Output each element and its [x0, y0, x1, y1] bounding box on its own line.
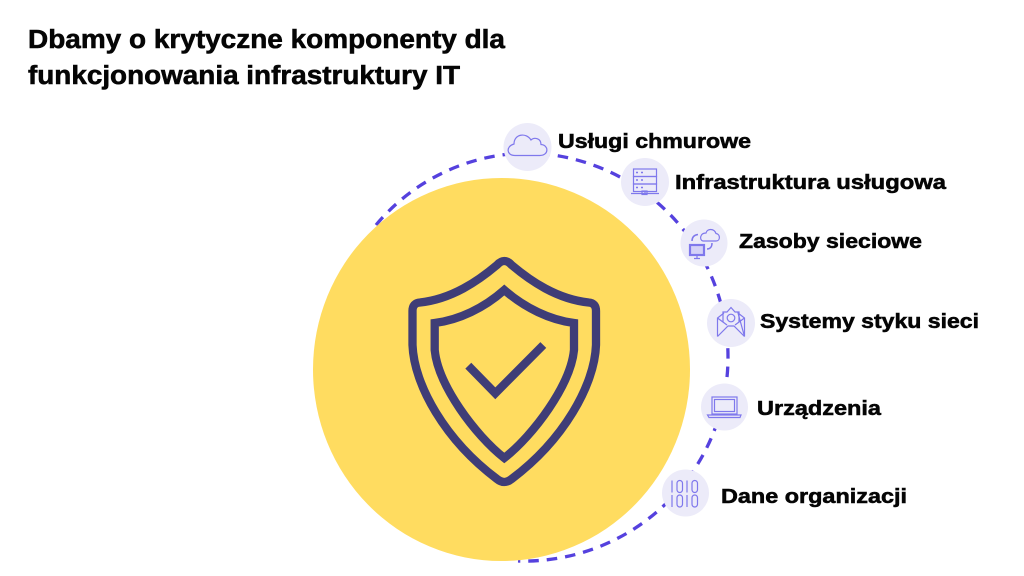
item: Urządzenia: Urządzenia — [757, 397, 882, 420]
item: Infrastruktura usługowa — [621, 158, 947, 206]
item: Systemy styku sieci — [707, 299, 979, 347]
icon: laptop — [701, 384, 748, 430]
item: Dane organizacji: Dane organizacji — [721, 485, 907, 508]
icon: shield with check mark — [412, 261, 596, 482]
title: funkcjonowania infrastruktury IT — [28, 62, 460, 90]
item: Zasoby sieciowe: Zasoby sieciowe — [739, 230, 922, 253]
icon: monitor and cloud — [680, 220, 728, 266]
icon: open envelope — [707, 299, 755, 347]
yellow central circle — [313, 178, 690, 561]
item: Zasoby sieciowe — [680, 220, 922, 266]
item: Usługi chmurowe: Usługi chmurowe — [558, 130, 751, 153]
item: Usługi chmurowe — [504, 123, 751, 171]
item: Infrastruktura usługowa: Infrastruktura usługowa — [675, 171, 947, 194]
item: Systemy styku sieci: Systemy styku sieci — [760, 310, 979, 333]
icon: cloud — [504, 123, 552, 171]
dashed orbit arc — [376, 153, 728, 561]
icon: server — [621, 158, 669, 206]
title — [28, 26, 506, 90]
item: Urządzenia — [701, 384, 882, 430]
title: Dbamy o krytyczne komponenty dla — [28, 26, 506, 54]
item: Dane organizacji — [662, 470, 907, 516]
icon: binary digits — [662, 470, 709, 516]
